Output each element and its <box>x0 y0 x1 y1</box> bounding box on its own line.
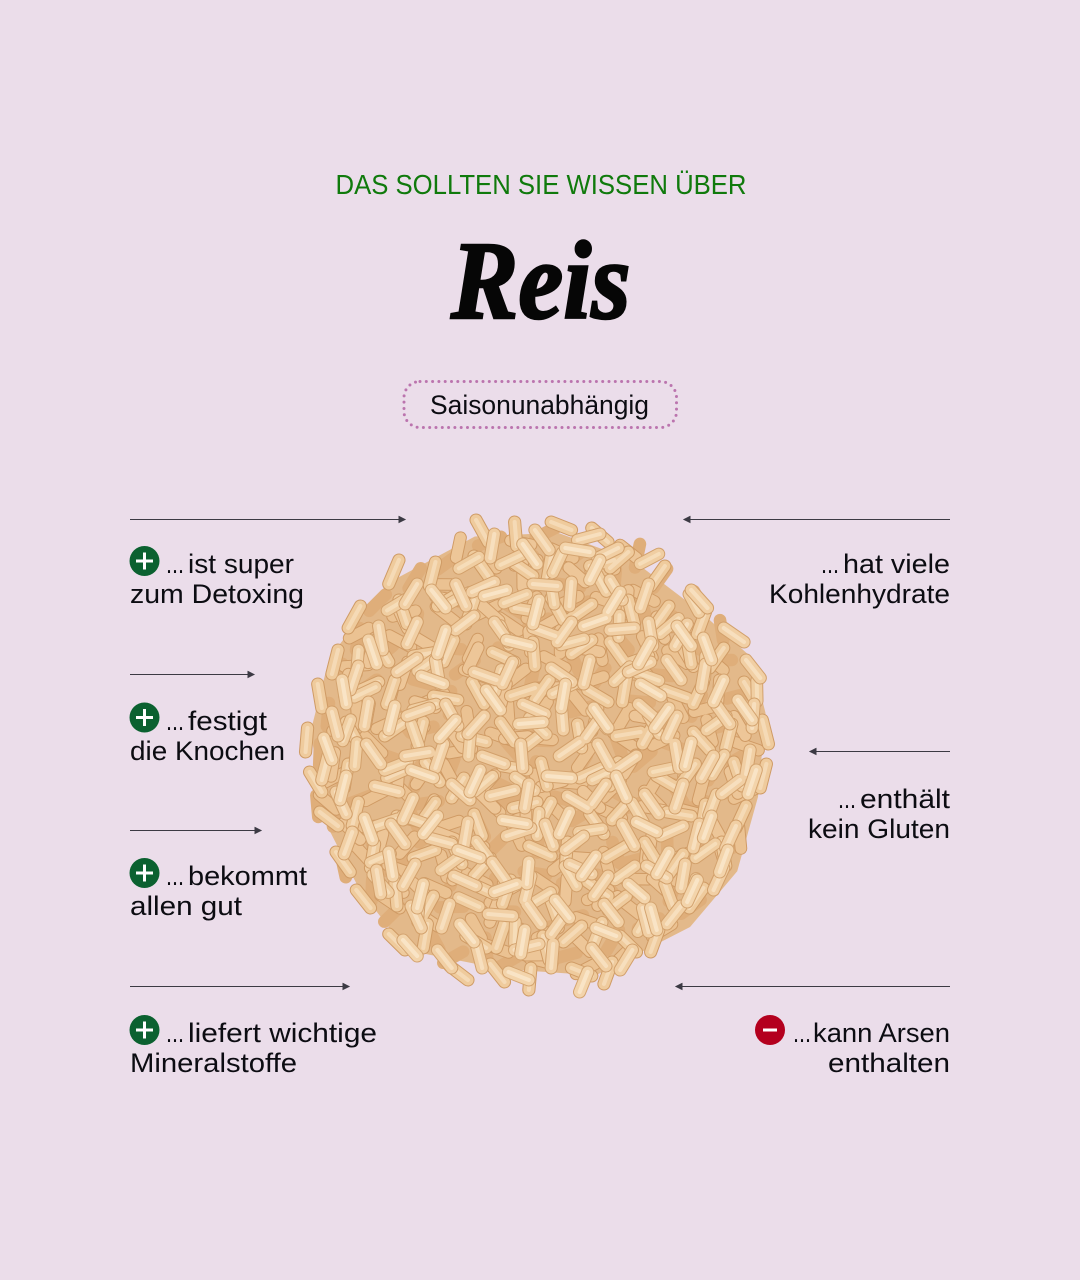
text: gluten: enthält <box>860 784 951 814</box>
icon: plus <box>130 702 160 732</box>
text: carbohydrates: hat viele <box>843 549 950 579</box>
text: minerals: ... <box>166 1018 184 1048</box>
callout: minerals <box>130 984 377 1078</box>
text: carbohydrates: Kohlenhydrate <box>769 579 950 609</box>
text: arsenic <box>793 1018 950 1078</box>
callout: arsenic <box>676 984 950 1078</box>
text: digestible: ... <box>166 861 184 891</box>
icon: plus <box>130 1015 160 1045</box>
text: carbohydrates: ... <box>821 549 839 579</box>
text: bones: die Knochen <box>130 736 285 766</box>
text: minerals <box>130 1018 377 1078</box>
text: detox: ... <box>166 549 184 579</box>
callout: carbohydrates <box>684 516 950 609</box>
icon: plus <box>130 858 160 888</box>
arrow: digestible <box>130 828 261 834</box>
icon: minus <box>755 1015 785 1045</box>
text: digestible: bekommt <box>188 861 308 891</box>
text: bones <box>130 706 285 766</box>
text: arsenic: kann Arsen <box>813 1018 950 1048</box>
text: detox: zum Detoxing <box>130 579 304 609</box>
arrow: arsenic <box>676 984 950 990</box>
text: minerals: Mineralstoffe <box>130 1048 297 1078</box>
season badge <box>404 382 676 428</box>
text: gluten: ... <box>838 784 856 814</box>
arrow: bones <box>130 672 254 678</box>
arrow: detox <box>130 516 405 522</box>
title: Reis <box>450 219 631 342</box>
text: detox: ist super <box>188 549 294 579</box>
text: bones: festigt <box>188 706 268 736</box>
callout: gluten <box>808 748 951 844</box>
text: minerals: liefert wichtige <box>188 1018 377 1048</box>
rice pile photo illustration <box>220 440 855 1067</box>
text: bones: ... <box>166 706 184 736</box>
text: digestible <box>130 861 308 921</box>
callout: detox <box>130 516 405 609</box>
text: detox <box>130 549 304 609</box>
text: digestible: allen gut <box>130 891 243 921</box>
arrow: carbohydrates <box>684 516 950 522</box>
text: arsenic: ... <box>793 1018 811 1048</box>
text: arsenic: enthalten <box>828 1048 950 1078</box>
arrow: gluten <box>810 748 950 754</box>
arrow: minerals <box>130 984 349 990</box>
callout: bones <box>130 672 285 766</box>
text: gluten <box>808 784 951 844</box>
text: gluten: kein Gluten <box>808 814 950 844</box>
callout: digestible <box>130 828 308 921</box>
eyebrow heading: DAS SOLLTEN SIE WISSEN ÜBER <box>336 169 746 200</box>
text: carbohydrates <box>769 549 950 609</box>
icon: plus <box>130 546 160 576</box>
season badge: Saisonunabhängig <box>430 390 649 420</box>
